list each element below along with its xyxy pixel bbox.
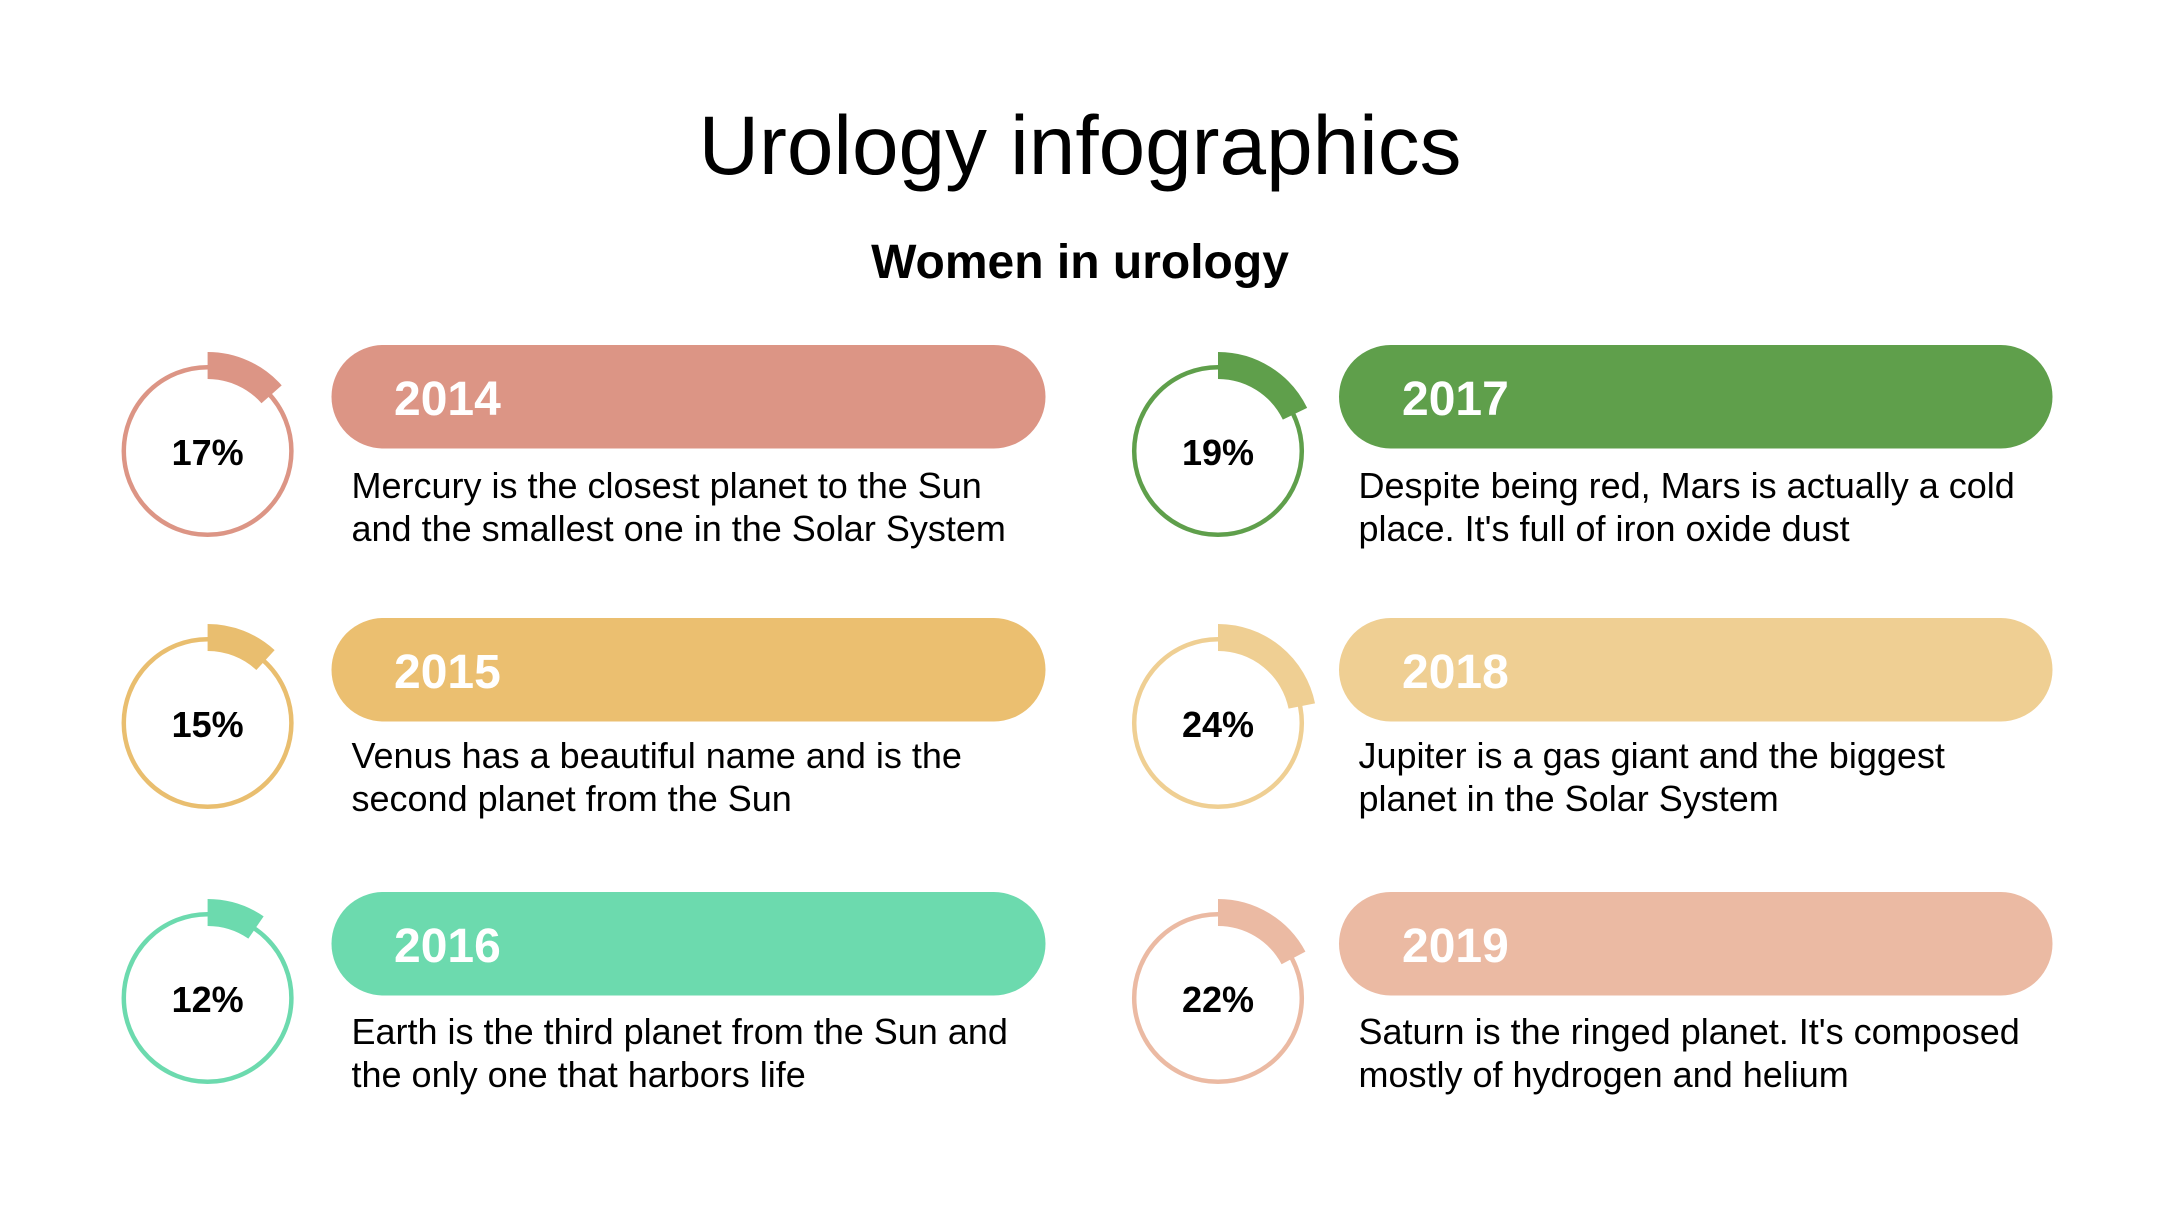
description: Venus: second planet from the Sun — [352, 778, 792, 819]
description: Jupiter: planet in the Solar System — [1358, 778, 1779, 819]
description: Mars: place. It's full of iron oxide dust — [1358, 508, 1850, 549]
year pill: 2014 — [332, 345, 1046, 448]
panel: 2014 — [124, 345, 1046, 549]
year pill: 2016: 2016 — [394, 920, 501, 973]
description: Earth: the only one that harbors life — [352, 1054, 806, 1095]
year pill: 2019 — [1339, 892, 2052, 996]
year pill: 2018 — [1339, 618, 2052, 722]
panel: 2017 — [1134, 345, 2052, 549]
panel: 2015 — [124, 618, 1046, 819]
year pill: 2015: 2015 — [394, 646, 501, 699]
donut gauge: 12% — [124, 912, 291, 1082]
panel: 2016 — [124, 892, 1046, 1095]
donut gauge: 12%: 12% — [172, 979, 244, 1020]
panel: 2019 — [1134, 892, 2052, 1095]
year pill: 2016 — [332, 892, 1046, 996]
year pill: 2015 — [332, 618, 1046, 722]
description: Venus: Venus has a beautiful name and is the — [352, 735, 962, 776]
description: Saturn: Saturn is the ringed planet. It's composed — [1358, 1011, 2020, 1052]
subtitle: Women in urology — [871, 236, 1289, 289]
year pill: 2018: 2018 — [1402, 646, 1509, 699]
donut gauge: 15% — [124, 638, 291, 807]
description: Jupiter: Jupiter is a gas giant and the biggest — [1358, 735, 1945, 776]
donut gauge: 19% — [1134, 366, 1302, 535]
description: Mars: Despite being red, Mars is actually a cold — [1358, 465, 2015, 506]
title: Urology infographics — [699, 98, 1461, 192]
year pill: 2014: 2014 — [394, 373, 501, 426]
description: Saturn: mostly of hydrogen and helium — [1358, 1054, 1849, 1095]
description: Earth: Earth is the third planet from the Sun and — [352, 1011, 1008, 1052]
donut gauge: 22% — [1134, 912, 1302, 1082]
donut gauge: 24% — [1134, 638, 1302, 807]
panel: 2018 — [1134, 618, 2052, 819]
donut gauge: 22%: 22% — [1182, 979, 1254, 1020]
donut gauge: 19%: 19% — [1182, 432, 1254, 473]
donut gauge: 15%: 15% — [172, 704, 244, 745]
description: Mercury: and the smallest one in the Solar System — [352, 508, 1006, 549]
year pill: 2017: 2017 — [1402, 373, 1509, 426]
donut gauge: 17%: 17% — [172, 432, 244, 473]
donut gauge: 24%: 24% — [1182, 704, 1254, 745]
donut gauge: 17% — [124, 366, 291, 535]
year pill: 2017 — [1339, 345, 2052, 448]
year pill: 2019: 2019 — [1402, 920, 1509, 973]
description: Mercury: Mercury is the closest planet to the Sun — [352, 465, 982, 506]
